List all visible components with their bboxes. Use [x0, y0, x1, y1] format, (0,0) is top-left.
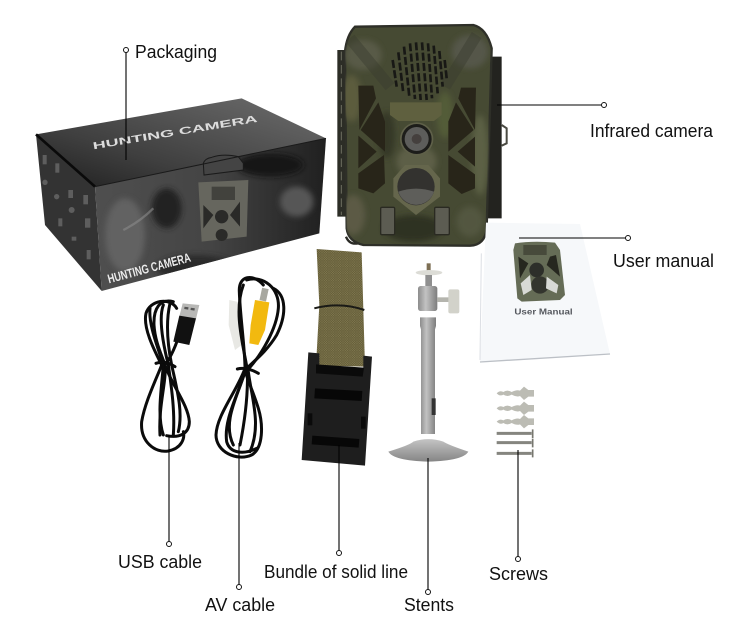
label: User manual	[519, 236, 714, 271]
screws	[497, 429, 533, 457]
infrared LED panels	[358, 86, 476, 194]
product: AV cable	[216, 277, 284, 457]
black mounting bracket	[302, 352, 372, 466]
yellow RCA plug	[249, 288, 269, 345]
label: Screws	[489, 450, 548, 584]
stand screw and ball head	[427, 263, 431, 273]
top center panel	[390, 102, 442, 121]
manual cover title: User Manual	[514, 307, 573, 317]
box lid	[36, 98, 326, 187]
USB plug	[173, 303, 199, 345]
nylon strap	[316, 249, 365, 367]
label: Bundle of solid line	[264, 445, 408, 582]
wall anchors	[497, 387, 534, 428]
camera hinge left	[337, 50, 346, 217]
box front text: HUNTING CAMERA	[106, 251, 192, 286]
label: USB cable	[118, 435, 202, 572]
label: User manual: User manual	[613, 250, 714, 271]
product: packaging box	[36, 98, 326, 291]
label: Packaging: Packaging	[135, 41, 217, 62]
label: Screws: Screws	[489, 563, 548, 584]
label: Bundle of solid line: Bundle of solid line	[264, 561, 408, 582]
thumb knob	[437, 297, 449, 302]
product: user manual	[480, 223, 610, 363]
camera strap right	[486, 57, 502, 218]
white RCA plug	[229, 300, 242, 350]
label: Stents	[404, 458, 454, 615]
bottom LED windows	[381, 207, 395, 235]
product: USB cable	[142, 301, 199, 451]
product: infrared camera	[337, 25, 507, 246]
box side panel	[36, 134, 102, 291]
camera lens	[400, 122, 433, 156]
label: AV cable	[205, 443, 275, 615]
box printed camera	[198, 180, 248, 242]
label: Infrared camera: Infrared camera	[590, 120, 714, 141]
stand base	[388, 439, 468, 462]
box front panel	[95, 138, 326, 291]
manual cover camera photo	[513, 242, 565, 302]
label: USB cable: USB cable	[118, 551, 202, 572]
box lid tab	[203, 155, 243, 175]
speaker grille	[393, 42, 447, 100]
product: mounting stents	[388, 263, 468, 462]
label: Packaging	[124, 41, 217, 160]
label: AV cable: AV cable	[205, 594, 275, 615]
camera body	[345, 25, 492, 246]
motion sensor window	[393, 165, 440, 215]
box lid text: HUNTING CAMERA	[92, 114, 258, 152]
stand pole	[420, 317, 436, 434]
product: strap and mount	[302, 249, 372, 466]
label: Infrared camera	[497, 102, 714, 141]
product: screws and wall anchors	[497, 387, 534, 457]
label: Stents: Stents	[404, 594, 454, 615]
